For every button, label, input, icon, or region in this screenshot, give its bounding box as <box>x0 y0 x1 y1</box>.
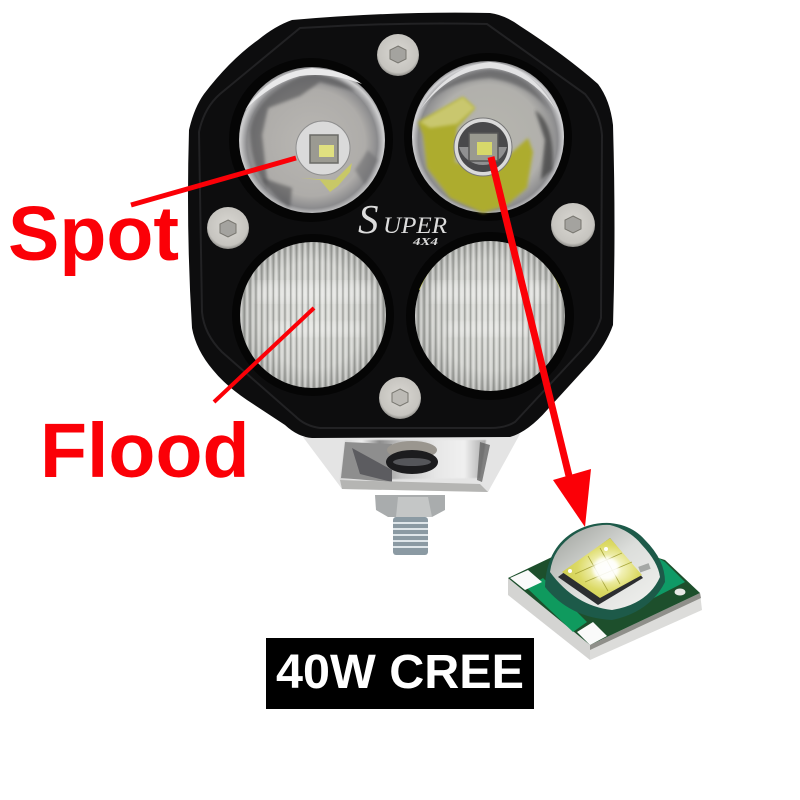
arrow: flood pointer <box>214 308 314 402</box>
brand logo: SUPER 4X4: S <box>358 196 378 242</box>
lens: bottom-right flood <box>406 232 574 400</box>
LED chip: 40W CREE emitter <box>508 523 702 660</box>
light housing <box>188 13 614 438</box>
label: Spot: Spot <box>8 191 179 277</box>
arrow: spot pointer <box>131 158 296 205</box>
dome lens <box>545 523 665 620</box>
arrow: LED pointer <box>491 157 591 527</box>
lens: bottom-left flood <box>232 234 394 396</box>
brand logo: SUPER 4X4: 4X4 <box>412 236 439 248</box>
mounting bracket <box>303 434 520 555</box>
lens: top-left spot <box>229 58 393 222</box>
brand logo: SUPER 4X4 <box>358 196 447 248</box>
brand logo: SUPER 4X4: UPER <box>383 213 447 238</box>
label: Flood: Flood <box>40 408 250 494</box>
bolt <box>375 495 445 555</box>
screws <box>207 34 595 419</box>
lens: top-right spot <box>404 53 572 221</box>
badge: 40W CREE: 40W CREE <box>276 645 524 699</box>
